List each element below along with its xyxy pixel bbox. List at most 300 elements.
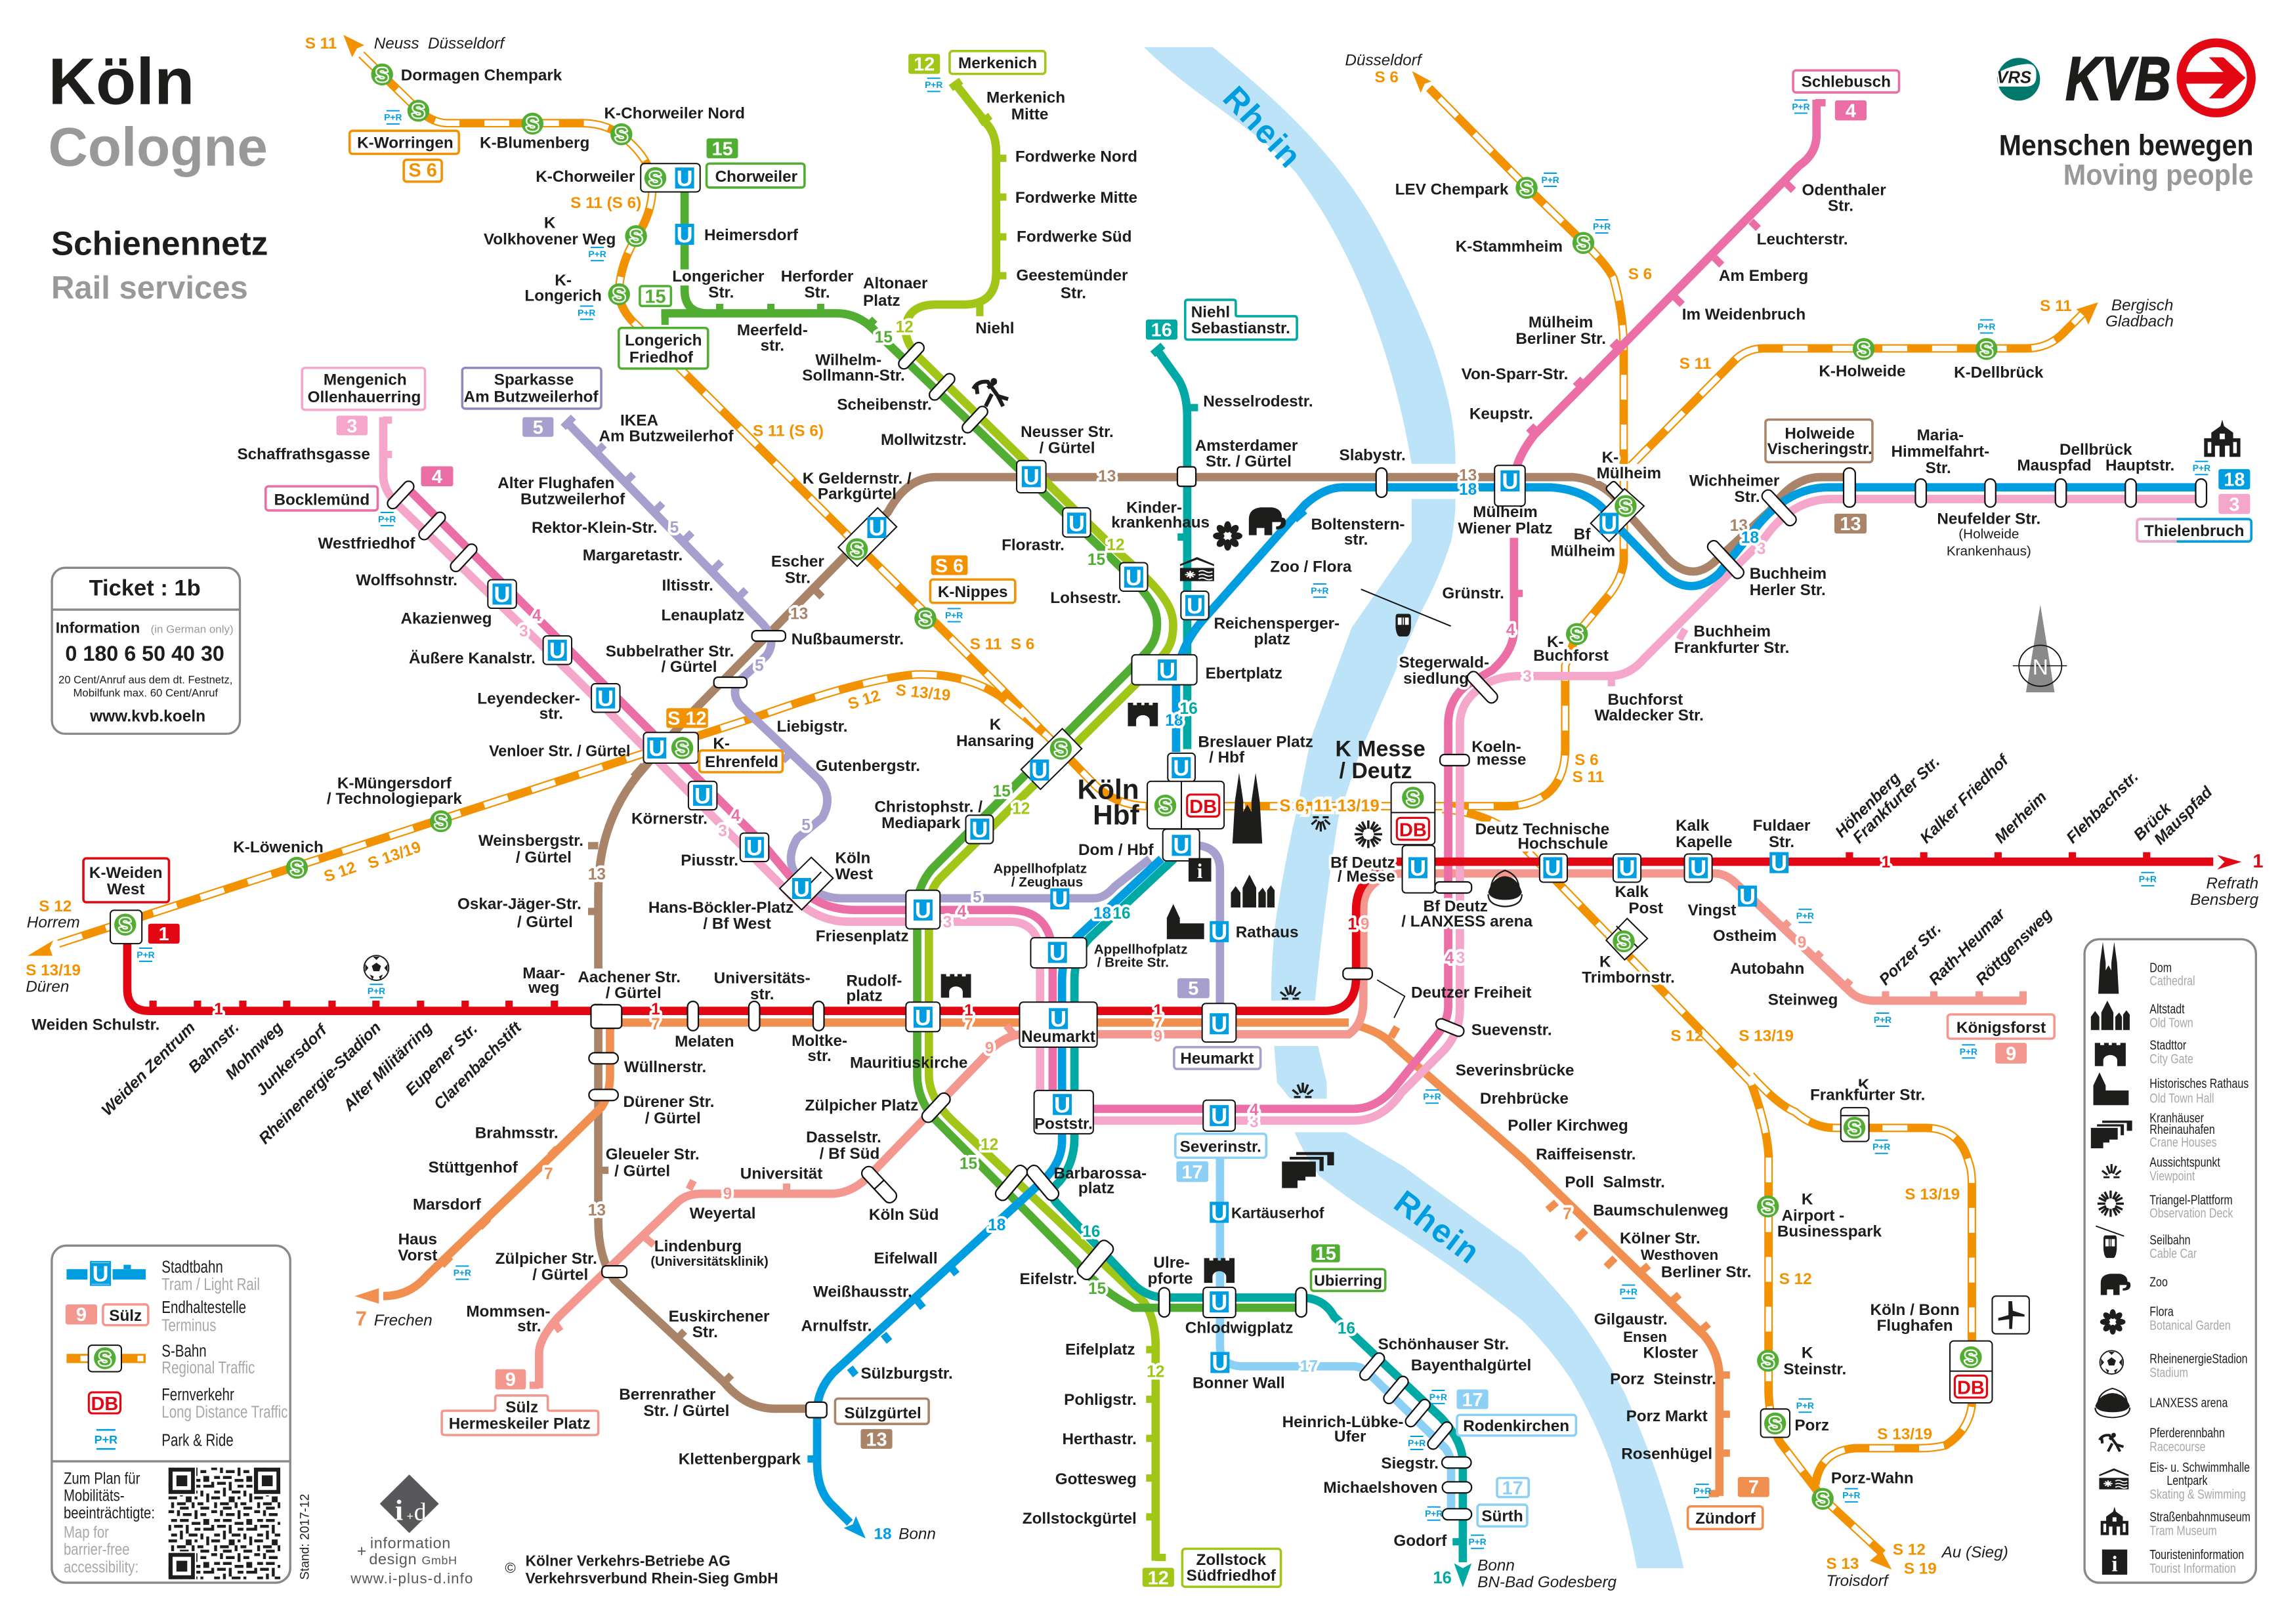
Park and Ride markers: P+R bbox=[1796, 1400, 1814, 1411]
stations: line 16 north and central labels: platz bbox=[1254, 631, 1290, 648]
stations: line 12 north labels: / Gürtel bbox=[1039, 440, 1095, 457]
terminus: Merkenich 12: Merkenich bbox=[958, 54, 1037, 72]
stations: south central labels: Rathaus bbox=[1236, 924, 1299, 942]
terminus: Zündorf 7: 7 bbox=[1748, 1477, 1759, 1498]
U-Bahn station symbols: U bbox=[1211, 1201, 1227, 1226]
heading: K Messe Deutz bbox=[1335, 737, 1426, 783]
stations: line 1 west and shared central labels: Eupener Str. bbox=[402, 1020, 481, 1099]
stations: S-Bahn south east labels: Airport - bbox=[1782, 1207, 1844, 1225]
stations: line 16 north and central labels: Slabystr. bbox=[1340, 447, 1406, 465]
destination labels in italics: Düsseldorf bbox=[1345, 51, 1423, 69]
stations: north east labels: Himmelfahrt- bbox=[1891, 443, 1989, 461]
tick and S-Bahn line labels: S 13/19 bbox=[1739, 1028, 1794, 1045]
stations: north east labels: LEV Chempark bbox=[1395, 181, 1509, 199]
stations: south central labels: platz bbox=[1078, 1180, 1114, 1197]
line number labels on tracks: 16 bbox=[1180, 700, 1198, 718]
stations: line 1 west and shared central labels: Universitäts- bbox=[714, 969, 811, 987]
stations: north east labels: Buchforst bbox=[1608, 691, 1683, 709]
icon: cathedral bbox=[1233, 773, 1262, 844]
stations: lines 3 and 4 north west labels: Hans-Böckler-Platz bbox=[648, 899, 793, 917]
Park and Ride markers: P+R bbox=[1423, 1091, 1441, 1102]
stations: line 5 labels: Subbelrather Str. bbox=[606, 643, 734, 661]
stations: S-Bahn west labels: Hansaring bbox=[956, 732, 1034, 750]
panel: ticket info: Information bbox=[56, 619, 140, 636]
stations: north east labels: Von-Sparr-Str. bbox=[1462, 365, 1568, 383]
stations: line 7 south labels: Porz Steinstr. bbox=[1610, 1370, 1716, 1388]
stations: north east labels: K-Stammheim bbox=[1456, 238, 1563, 255]
stations: north east labels: Keupstr. bbox=[1469, 406, 1533, 423]
stations: line 1 west and shared central labels bbox=[32, 965, 967, 1148]
stations: line 5 labels: / Zeughaus bbox=[1011, 875, 1083, 890]
tag: 15 Longerich bbox=[640, 286, 671, 307]
destination labels in italics: Düren bbox=[26, 978, 69, 996]
stations: line 13 and 7 west labels: Oskar-Jäger-Str. bbox=[457, 895, 581, 913]
stations: line 7 south labels: Ensen bbox=[1623, 1329, 1667, 1345]
stations: S-Bahn south east labels: K bbox=[1802, 1344, 1813, 1362]
stations: line 13 and 7 west labels: (Universitätsklinik) bbox=[650, 1255, 769, 1269]
stations: line 5 labels bbox=[497, 411, 1187, 970]
legend texts: Old Town bbox=[2149, 1014, 2193, 1030]
legend: S-Bahn: S bbox=[98, 1348, 111, 1369]
stations: south Rhine lines 16 and 17 labels: Michaelshoven bbox=[1323, 1479, 1438, 1497]
destination labels in italics: Horrem bbox=[27, 914, 80, 932]
line 18 blue bbox=[807, 488, 2200, 1523]
stations: north east labels: (Holweide bbox=[1958, 527, 2019, 542]
terminus: Niehl Sebastianstr 16: Niehl bbox=[1191, 303, 1230, 321]
legend texts: Old Town Hall bbox=[2149, 1090, 2214, 1106]
slogan bbox=[1999, 130, 2254, 191]
stations: line 7 south labels bbox=[1456, 1062, 1752, 1463]
terminus: Sürth 17 bbox=[1477, 1478, 1529, 1526]
stations: line 13 and 7 west labels: Lindenburg bbox=[654, 1238, 742, 1255]
stations: line 16 north and central labels: Nesselrodestr. bbox=[1203, 393, 1313, 411]
stations: south central labels: Eifelwall bbox=[874, 1249, 938, 1267]
stations: line 13 and 7 west labels: Str. bbox=[692, 1323, 718, 1341]
line number labels on tracks: 5 bbox=[755, 657, 764, 675]
terminus: Sülzgürtel 13: Sülzgürtel bbox=[844, 1404, 921, 1422]
stations: line 1 west and shared central labels: weg bbox=[528, 979, 559, 997]
coloured line destination numbers: 7 bbox=[356, 1307, 367, 1330]
legend texts: Tram Museum bbox=[2149, 1522, 2217, 1538]
line number labels on tracks: 15 bbox=[875, 329, 893, 346]
stations: north west labels: K bbox=[544, 215, 555, 232]
legend texts: Seilbahn bbox=[2149, 1232, 2191, 1247]
icon: compass north bbox=[2013, 605, 2067, 692]
stations: line 9 east and line 1 east labels: Autobahn bbox=[1730, 960, 1804, 978]
line number labels on tracks: 18 bbox=[1741, 529, 1759, 547]
destination labels in italics: Gladbach bbox=[2105, 313, 2174, 331]
tick and S-Bahn line labels: S 6, 11-13/19 bbox=[1279, 797, 1380, 816]
terminus: Königsforst 9: Königsforst bbox=[1956, 1019, 2046, 1037]
stations: east bank labels: / Messe bbox=[1338, 868, 1395, 886]
icon: race course bbox=[973, 378, 1008, 406]
S-Bahn station symbols: S bbox=[412, 101, 425, 122]
stations: north east labels: Str. bbox=[1828, 197, 1853, 215]
terminus: Königsforst 9 bbox=[1947, 1014, 2054, 1064]
icon: city gate Eigelstein bbox=[1128, 703, 1158, 726]
stations: north west labels: Volkhovener Weg bbox=[484, 230, 616, 248]
tag: S 12 K-Ehrenfeld bbox=[666, 708, 782, 772]
stations: line 5 labels: Am Butzweilerhof bbox=[599, 427, 734, 445]
tag: 15 Longerich: 15 bbox=[644, 286, 666, 307]
stations: lines 3 and 4 north west labels: Westfriedhof bbox=[318, 535, 415, 552]
stations: south central labels: Eifelplatz bbox=[1065, 1341, 1135, 1358]
terminus: Holweide Vischeringstr 13: 13 bbox=[1840, 514, 1861, 535]
Park and Ride markers: P+R bbox=[945, 610, 963, 620]
legend: left texts: Tram / Light Rail bbox=[161, 1275, 260, 1293]
line number labels on tracks: 3 bbox=[1250, 1114, 1259, 1131]
terminus: Ubierring 15: 15 bbox=[1315, 1243, 1336, 1264]
U-Bahn station symbols: U bbox=[1068, 512, 1085, 537]
stations: north east labels: Hauptstr. bbox=[2105, 457, 2174, 474]
legend: left texts: Fernverkehr bbox=[161, 1385, 234, 1404]
stations: line 13 and 7 west labels: Weyertal bbox=[690, 1205, 755, 1222]
logo: information design: information bbox=[370, 1534, 451, 1551]
stations: line 1 west and shared central labels: str. bbox=[807, 1047, 832, 1065]
terminus: Holweide Vischeringstr 13: Holweide bbox=[1785, 425, 1855, 442]
terminus: K-Worringen: K-Worringen bbox=[357, 135, 454, 152]
line number labels on tracks: 9 bbox=[723, 1185, 732, 1203]
line number labels on tracks: 12 bbox=[981, 1136, 998, 1154]
terminus: Thielenbruch 18 and 3: 18 bbox=[2224, 469, 2245, 490]
line number labels on tracks: 18 bbox=[1459, 481, 1477, 499]
legend: left texts: accessibility: bbox=[64, 1558, 138, 1576]
line number labels on tracks: 4 bbox=[1250, 1102, 1259, 1119]
stations: north west labels: Longerich bbox=[524, 287, 602, 305]
Park and Ride markers: P+R bbox=[1977, 321, 1995, 331]
line 15 green bbox=[661, 192, 1300, 1308]
stations: line 1 east rotated labels: Rath-Heumar bbox=[1926, 905, 2010, 989]
stations: north east labels: Str. bbox=[1926, 459, 1951, 477]
stations: line 1 east rotated labels: Flehbachstr. bbox=[2063, 768, 2142, 847]
terminus: Niehl Sebastianstr 16 bbox=[1146, 300, 1297, 341]
river Rhine bbox=[1144, 47, 1683, 1568]
terminus: Sülz Hermeskeiler Platz 9: Sülz bbox=[505, 1399, 538, 1417]
stations: north west labels: Str. bbox=[804, 284, 830, 302]
stations: line 7 south labels: Berliner Str. bbox=[1661, 1263, 1752, 1281]
legend texts: Aussichtspunkt bbox=[2149, 1154, 2220, 1169]
terminus: Heumarkt 5 bbox=[1174, 978, 1261, 1069]
legend texts: Cable Car bbox=[2149, 1245, 2197, 1261]
stations: line 1 east rotated labels bbox=[1832, 751, 2216, 989]
stations: line 12 north labels: Lohsestr. bbox=[1050, 589, 1121, 607]
stations: line 16 north and central labels: krankenhaus bbox=[1111, 514, 1210, 531]
terminus: Longerich Friedhof: Friedhof bbox=[629, 349, 694, 367]
stations: line 5 labels: West bbox=[835, 865, 873, 883]
legend: left texts: barrier-free bbox=[64, 1541, 130, 1558]
stations: line 9 east and line 1 east labels: Kalk bbox=[1676, 817, 1709, 835]
line number labels on tracks: 1 bbox=[1154, 1002, 1162, 1020]
U-Bahn station symbols: U bbox=[1690, 856, 1706, 881]
line number labels on tracks: 1 bbox=[214, 1001, 223, 1018]
Park and Ride markers: P+R bbox=[925, 79, 942, 90]
box labels in stations: Neumarkt Poststr: Neumarkt bbox=[1021, 1028, 1095, 1046]
stations: south Rhine lines 16 and 17 labels bbox=[1282, 1335, 1531, 1550]
stations: S-Bahn south east labels: Businesspark bbox=[1777, 1222, 1882, 1240]
legend: Endhaltestelle: 9 bbox=[76, 1304, 87, 1325]
S-Bahn station symbols: S bbox=[526, 114, 539, 135]
U-Bahn station symbols: U bbox=[1619, 856, 1636, 881]
stations: lines 3 and 4 north west labels: Akazienweg bbox=[400, 610, 492, 628]
stations: north east labels: Buchforst bbox=[1533, 647, 1609, 665]
line number labels on tracks: 1 bbox=[1348, 915, 1357, 933]
U-Bahn station symbols: U bbox=[549, 638, 566, 663]
icon: town hall bbox=[1167, 904, 1204, 939]
terminus: Zündorf 7: Zündorf bbox=[1695, 1510, 1756, 1528]
stations: south central labels bbox=[801, 924, 1324, 1528]
tick and S-Bahn line labels: S 12 bbox=[1670, 1028, 1703, 1045]
terminus: K-Weiden West 1: West bbox=[107, 881, 144, 898]
tick and S-Bahn line labels: S 13/19 bbox=[366, 838, 423, 873]
line number labels on tracks: 3 bbox=[718, 822, 727, 840]
S-Bahn station symbols: S bbox=[1848, 1118, 1861, 1139]
stations: line 1 west and shared central labels: Rudolf- bbox=[846, 972, 902, 989]
DB symbols bbox=[1187, 795, 1987, 1398]
legend: S-Bahn bbox=[66, 1345, 146, 1371]
terminus: Sparkasse Am Butzweilerhof 5: 5 bbox=[533, 417, 543, 438]
U-Bahn station symbols: U bbox=[1173, 834, 1189, 859]
stations: line 7 south labels: Rosenhügel bbox=[1621, 1446, 1712, 1463]
U-Bahn station symbols: U bbox=[1187, 594, 1203, 619]
stations: south central labels: Zollstockgürtel bbox=[1023, 1510, 1137, 1528]
stations: east bank labels: Hochschule bbox=[1518, 835, 1608, 852]
S-Bahn station symbols: S bbox=[1762, 1197, 1774, 1218]
terminus: Zollstock Südfriedhof 12: 12 bbox=[1148, 1568, 1169, 1589]
icon: airplane bbox=[1992, 1296, 2029, 1334]
legend texts: Pferderennbahn bbox=[2149, 1425, 2225, 1440]
legend: left texts: S-Bahn bbox=[161, 1341, 207, 1360]
logo: KVB arrow bbox=[2065, 43, 2251, 113]
line number labels on tracks: 12 bbox=[1107, 537, 1125, 554]
icon: football bbox=[364, 955, 389, 980]
line number labels on tracks: 1 bbox=[1882, 854, 1890, 871]
stations: line 13 and 7 west labels: str. bbox=[517, 1318, 541, 1335]
legend: left texts: Endhaltestelle bbox=[161, 1298, 246, 1317]
tag: K-Nippes S 6: S 6 bbox=[935, 556, 963, 577]
line 17 light blue bbox=[1220, 1156, 1451, 1514]
U-Bahn station symbols: U bbox=[1050, 1007, 1067, 1032]
tag: S 12 K-Ehrenfeld: S 12 bbox=[667, 708, 707, 729]
stations: line 1 west and shared central labels: Junkersdorf bbox=[253, 1020, 332, 1099]
destination labels in italics: Bensberg bbox=[2190, 891, 2259, 909]
legend icons: i bbox=[2111, 1552, 2118, 1576]
stations: line 12 north labels: Fordwerke Mitte bbox=[1015, 189, 1137, 207]
stations: line 5 labels: Lenauplatz bbox=[661, 606, 744, 624]
heading: K Messe Deutz: K Messe bbox=[1335, 737, 1426, 762]
icon: lanxess arena bbox=[1488, 871, 1522, 907]
box labels in stations: Neumarkt Poststr bbox=[1021, 1028, 1095, 1133]
stations: line 13 and 7 west labels: / Gürtel bbox=[516, 849, 572, 867]
line number labels on tracks: 3 bbox=[519, 623, 528, 640]
stations: east bank labels: K- bbox=[1602, 449, 1618, 467]
stations: line 5 labels: IKEA bbox=[620, 411, 658, 429]
S-Bahn station symbols: S bbox=[649, 169, 662, 190]
terminus: Niehl Sebastianstr 16: 16 bbox=[1151, 320, 1172, 341]
U-Bahn station symbols: U bbox=[915, 1005, 931, 1030]
terminus: Holweide Vischeringstr 13 bbox=[1765, 420, 1872, 535]
U-Bahn station symbols: U bbox=[1173, 756, 1189, 781]
stations: line 16 north and central labels: str. bbox=[1344, 531, 1368, 549]
legend texts: LANXESS arena bbox=[2149, 1395, 2228, 1410]
stations: line 7 south labels: Westhoven bbox=[1641, 1247, 1718, 1263]
line number labels on tracks: 1 bbox=[964, 1002, 973, 1020]
legend texts: Touristeninformation bbox=[2149, 1547, 2244, 1562]
destination labels in italics: Frechen bbox=[374, 1312, 433, 1329]
terminus: Zollstock Südfriedhof 12: Zollstock bbox=[1196, 1551, 1266, 1569]
S-Bahn station symbols: S bbox=[1617, 932, 1630, 953]
stations: south central labels: / Bf Süd bbox=[820, 1145, 879, 1163]
Park and Ride markers: P+R bbox=[1408, 1438, 1426, 1448]
icon: tram museum bbox=[2204, 420, 2241, 457]
U-Bahn station symbols: U bbox=[1544, 856, 1561, 881]
stations: line 16 north and central labels: Breslauer Platz bbox=[1198, 733, 1313, 751]
stations: line 7 south labels: Kloster bbox=[1643, 1344, 1699, 1362]
tick and S-Bahn line labels: S 11 (S 6) bbox=[753, 423, 824, 440]
stations: north east labels: Str. bbox=[1735, 488, 1760, 506]
stations: south central labels: Pohligstr. bbox=[1064, 1391, 1137, 1409]
Park and Ride markers: P+R bbox=[1620, 1286, 1638, 1297]
logo: information design: www.i-plus-d.info bbox=[350, 1570, 473, 1587]
legend: DB: DB bbox=[91, 1394, 118, 1415]
line number labels on tracks: 9 bbox=[1361, 915, 1369, 933]
line 4 pink bbox=[404, 100, 1826, 1109]
logo: information design: i bbox=[395, 1493, 403, 1526]
stations: line 16 north and central labels: Boltenstern- bbox=[1311, 516, 1405, 533]
S-Bahn station symbols: S bbox=[613, 285, 625, 306]
line number labels on tracks: 7 bbox=[1563, 1205, 1572, 1223]
stations: line 9 east and line 1 east labels: Vingst bbox=[1688, 902, 1736, 919]
Park and Ride markers: P+R bbox=[384, 112, 402, 123]
stations: line 1 west and shared central labels: Aachener Str. bbox=[578, 968, 681, 986]
U-Bahn station symbols: U bbox=[677, 222, 693, 247]
icon: city gate Hahnentor bbox=[941, 974, 971, 998]
Park and Ride markers: P+R bbox=[2193, 463, 2210, 473]
stations: line 12 north labels: Neusser Str. bbox=[1021, 423, 1114, 441]
tick and S-Bahn line labels: S 12 bbox=[1893, 1541, 1926, 1559]
tick and S-Bahn line labels: S 13 bbox=[1826, 1555, 1859, 1573]
U-Bahn station symbols: U bbox=[869, 516, 885, 541]
terminus: Rodenkirchen 17 bbox=[1456, 1389, 1576, 1436]
stations: south central labels: Dasselstr. bbox=[806, 1129, 881, 1146]
tag: K-Nippes S 6: K-Nippes bbox=[938, 583, 1007, 601]
terminus: Sülzgürtel 13 bbox=[835, 1398, 929, 1450]
legend texts: Cathedral bbox=[2149, 972, 2195, 988]
legend texts: Flora bbox=[2149, 1303, 2174, 1319]
stations: line 13 and 7 west labels: Euskirchener bbox=[669, 1308, 769, 1325]
stations: line 5 labels: Nußbaumerstr. bbox=[792, 631, 904, 648]
stations: south Rhine lines 16 and 17 labels: Schönhauser Str. bbox=[1378, 1335, 1509, 1353]
tick and S-Bahn line labels: S 19 bbox=[1904, 1560, 1937, 1577]
stations: line 1 west and shared central labels: Alter Militärring bbox=[339, 1018, 436, 1115]
line number labels on tracks: 12 bbox=[1147, 1363, 1164, 1381]
stations: line 16 north and central labels bbox=[1078, 393, 1406, 859]
terminus: Sülz Hermeskeiler Platz 9: Hermeskeiler Platz bbox=[449, 1415, 591, 1432]
U-Bahn station symbols: U bbox=[1211, 920, 1227, 945]
stations: line 7 south labels: Poll Salmstr. bbox=[1565, 1174, 1665, 1192]
DB symbols: DB bbox=[1957, 1377, 1985, 1398]
line number labels on tracks: 13 bbox=[1459, 467, 1477, 484]
terminus: Heumarkt 5: Heumarkt bbox=[1180, 1050, 1254, 1068]
line 5 purple bbox=[563, 417, 1220, 1003]
QR code bbox=[169, 1468, 280, 1579]
S-Bahn station symbols: S bbox=[1577, 234, 1590, 255]
stations: line 7 south labels: Drehbrücke bbox=[1480, 1090, 1569, 1108]
subtitle: Schienennetz Rail services bbox=[51, 224, 268, 306]
stations: south central labels: Herthastr. bbox=[1062, 1430, 1137, 1448]
legend texts: Historisches Rathaus bbox=[2149, 1075, 2249, 1091]
stations: line 1 west and shared central labels: Bahnstr. bbox=[185, 1019, 243, 1076]
line number labels on tracks: 4 bbox=[1445, 949, 1454, 967]
terminus: Severinstr 17: Severinstr. bbox=[1180, 1138, 1261, 1156]
stations: north east labels: Frankfurter Str. bbox=[1674, 639, 1789, 657]
stations: line 1 west and shared central labels: Wüllnerstr. bbox=[624, 1058, 706, 1076]
line number labels on tracks: 16 bbox=[1112, 905, 1130, 923]
terminus: Rodenkirchen 17: Rodenkirchen bbox=[1463, 1417, 1569, 1435]
Park and Ride markers: P+R bbox=[368, 986, 385, 996]
stations: line 5 labels: Alter Flughafen bbox=[497, 474, 614, 492]
stations: south Rhine lines 16 and 17 labels: Ufer bbox=[1334, 1428, 1366, 1446]
stations: line 13 and 7 west labels: Zülpicher Str. bbox=[496, 1250, 597, 1268]
title: Köln Cologne: Köln bbox=[49, 45, 194, 119]
stations: line 7 south labels: Poller Kirchweg bbox=[1508, 1117, 1628, 1135]
stations: line 1 west and shared central labels: Clarenbachstift bbox=[431, 1018, 526, 1114]
terminus: Sülz Hermeskeiler Platz 9 bbox=[442, 1369, 599, 1435]
U-Bahn station symbols: U bbox=[1049, 941, 1066, 966]
stations: north east labels: Neufelder Str. bbox=[1937, 510, 2040, 528]
stations: line 1 west and shared central labels: Mauritiuskirche bbox=[850, 1054, 967, 1072]
line number labels on tracks: 15 bbox=[960, 1155, 977, 1173]
stations: line 16 north and central labels: Reichensperger- bbox=[1214, 615, 1340, 633]
legend texts: City Gate bbox=[2149, 1051, 2193, 1066]
stations: S-Bahn south east labels: Porz-Wahn bbox=[1831, 1470, 1914, 1488]
tick and S-Bahn line labels: S 6 bbox=[1374, 69, 1399, 87]
stations: north west labels: str. bbox=[761, 337, 784, 355]
S-Bahn station symbols: S bbox=[1571, 625, 1583, 646]
Park and Ride markers: P+R bbox=[1425, 1509, 1443, 1519]
stations: line 1 west and shared central labels: Weiden Zentrum bbox=[98, 1019, 199, 1119]
destination labels in italics: Neuss Düsseldorf bbox=[374, 35, 505, 52]
stations: north west labels: Altonaer bbox=[863, 275, 928, 293]
terminus: Niehl Sebastianstr 16: Sebastianstr. bbox=[1191, 320, 1290, 337]
stations: line 1 east rotated labels: Mauspfad bbox=[2151, 783, 2216, 848]
Park and Ride markers: P+R bbox=[1792, 101, 1810, 112]
line number labels on tracks: 13 bbox=[588, 1202, 606, 1220]
stations: line 12 north labels: Wilhelm- bbox=[815, 352, 881, 369]
stations: line 13 and 7 west labels: / Gürtel bbox=[645, 1110, 701, 1127]
legend icons bbox=[2091, 942, 2132, 1576]
stations: line 7 south labels: Porz Markt bbox=[1626, 1407, 1708, 1425]
tick and S-Bahn line labels: S 11 bbox=[305, 35, 337, 52]
stations: line 7 south labels: Severinsbrücke bbox=[1456, 1062, 1574, 1079]
stations: line 5 labels: Appellhofplatz bbox=[1094, 942, 1187, 957]
stations: line 13 and 7 west labels: Klettenbergpark bbox=[679, 1451, 801, 1468]
stations: north east labels: Mülheim bbox=[1529, 314, 1593, 331]
stations: east bank labels: Suevenstr. bbox=[1471, 1022, 1552, 1039]
panel: ticket info: www.kvb.koeln bbox=[89, 707, 205, 725]
panel: ticket info: Ticket : 1b bbox=[89, 576, 201, 601]
legend texts: Tourist Information bbox=[2149, 1560, 2236, 1576]
legend: Stadtbahn: U bbox=[93, 1262, 109, 1287]
destination labels in italics: Troisdorf bbox=[1826, 1572, 1890, 1590]
icon: skating swimming bbox=[1180, 557, 1214, 581]
icon: old town bbox=[1231, 875, 1275, 907]
line number labels on tracks: 9 bbox=[1154, 1028, 1162, 1045]
stations: line 1 west and shared central labels: Melaten bbox=[675, 1033, 734, 1051]
terminus: Ubierring 15: Ubierring bbox=[1314, 1272, 1382, 1289]
terminus: Schlebusch 4: 4 bbox=[1846, 100, 1856, 121]
stations: north east labels: Krankenhaus) bbox=[1947, 543, 2031, 558]
stations: line 12 north labels: Merkenich bbox=[986, 89, 1065, 107]
